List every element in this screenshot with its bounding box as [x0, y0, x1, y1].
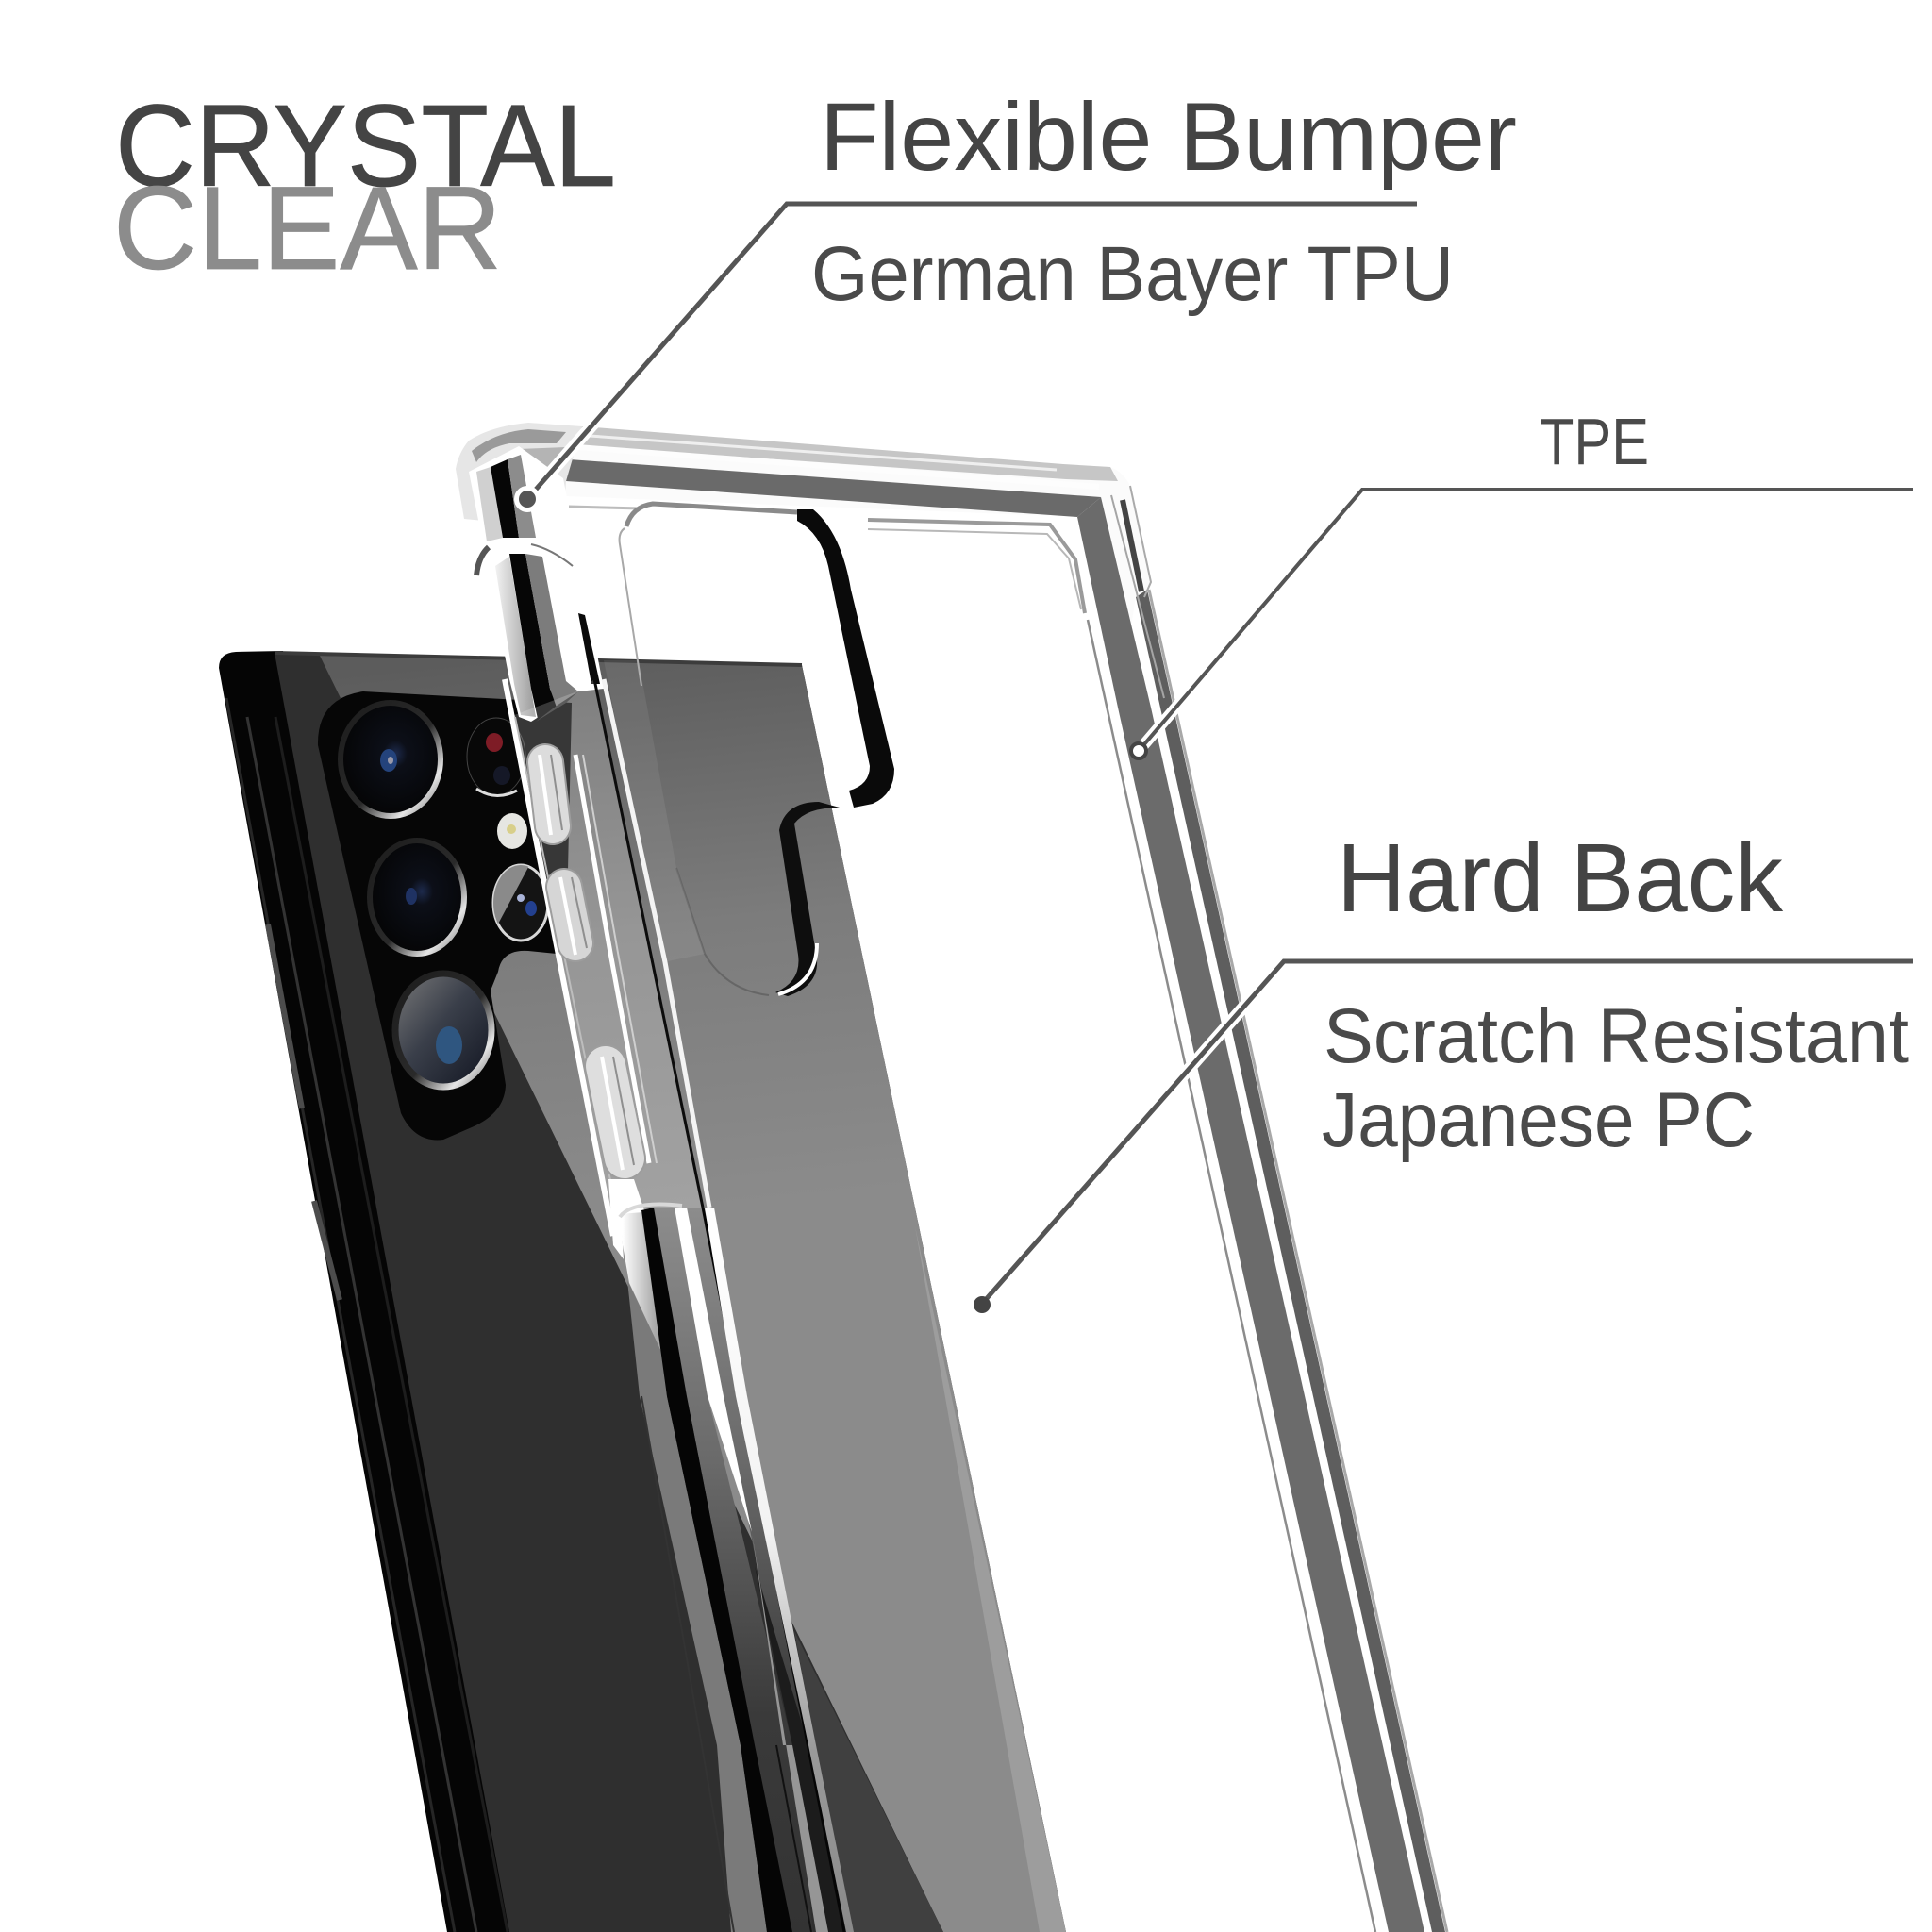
- right frame band: [1077, 497, 1424, 1932]
- tube lower reflection: [509, 554, 578, 722]
- tube upper reflection: [476, 455, 536, 541]
- phone side buttons: [268, 924, 340, 1300]
- top frame body: [563, 426, 1151, 708]
- phone side stripes: [226, 698, 508, 1932]
- camera cutout black edge: [797, 509, 894, 808]
- corner top left: [456, 423, 582, 528]
- callout: hard back: [974, 824, 1913, 1313]
- heading: Flexible Bumper: [820, 83, 1517, 191]
- bumper rails: [505, 679, 709, 1236]
- phone dark back panel: [275, 653, 1066, 1932]
- lower bumper reflection: [608, 1179, 943, 1932]
- title: [113, 82, 616, 294]
- top frame upper strip: [571, 426, 1118, 481]
- subheading line two: Japanese PC: [1322, 1077, 1755, 1163]
- notch highlight: [778, 943, 817, 994]
- dot: [974, 1296, 991, 1313]
- dot: [1131, 743, 1146, 758]
- right corner detail: [1111, 486, 1164, 698]
- right frame thin line: [1088, 620, 1375, 1932]
- clear case: [456, 423, 1447, 1932]
- phone body black side: [219, 651, 528, 1932]
- bumper collar: [476, 541, 573, 575]
- callout: TPE: [1131, 405, 1913, 758]
- camera block: [318, 691, 572, 1140]
- panel soft edge: [915, 1226, 1066, 1932]
- third lens: [395, 974, 491, 1087]
- leader line: [982, 961, 1913, 1304]
- top frame white rails: [577, 436, 1099, 487]
- notch black edge: [775, 802, 840, 996]
- phone glossy reflection: [320, 656, 1066, 1932]
- inner ledge: [569, 507, 1085, 613]
- dot: [517, 489, 538, 509]
- subheading line one: Scratch Resistant: [1324, 993, 1909, 1079]
- flash: [497, 813, 527, 849]
- phone: [219, 651, 1066, 1932]
- callout: flexible bumper: [517, 83, 1517, 509]
- second lens: [370, 841, 464, 954]
- right outer band: [1136, 590, 1445, 1932]
- notch lower outline: [676, 868, 769, 995]
- leader line: [1139, 490, 1913, 751]
- heading: Hard Back: [1337, 824, 1783, 932]
- button one: [540, 755, 562, 835]
- button two: [560, 877, 587, 955]
- button three: [602, 1057, 634, 1170]
- phone top edge: [275, 653, 802, 665]
- right outer band soft edge: [1149, 590, 1447, 1932]
- left bumper clear strip: [509, 679, 705, 1217]
- main lens: [341, 703, 441, 816]
- top frame dark band: [566, 459, 1101, 517]
- label: TPE: [1540, 405, 1649, 478]
- tube gradient left: [495, 557, 536, 717]
- subheading: German Bayer TPU: [811, 231, 1454, 317]
- title line crystal: CRYSTAL: [115, 82, 616, 211]
- tube base: [469, 446, 604, 722]
- title line clear: CLEAR: [113, 163, 502, 294]
- cutout side halo: [604, 660, 705, 962]
- small sensor: [467, 718, 525, 796]
- leader line: [527, 204, 1417, 499]
- tube slit: [578, 613, 600, 684]
- camera cutout outline: [620, 504, 797, 686]
- telephoto lens: [492, 864, 548, 941]
